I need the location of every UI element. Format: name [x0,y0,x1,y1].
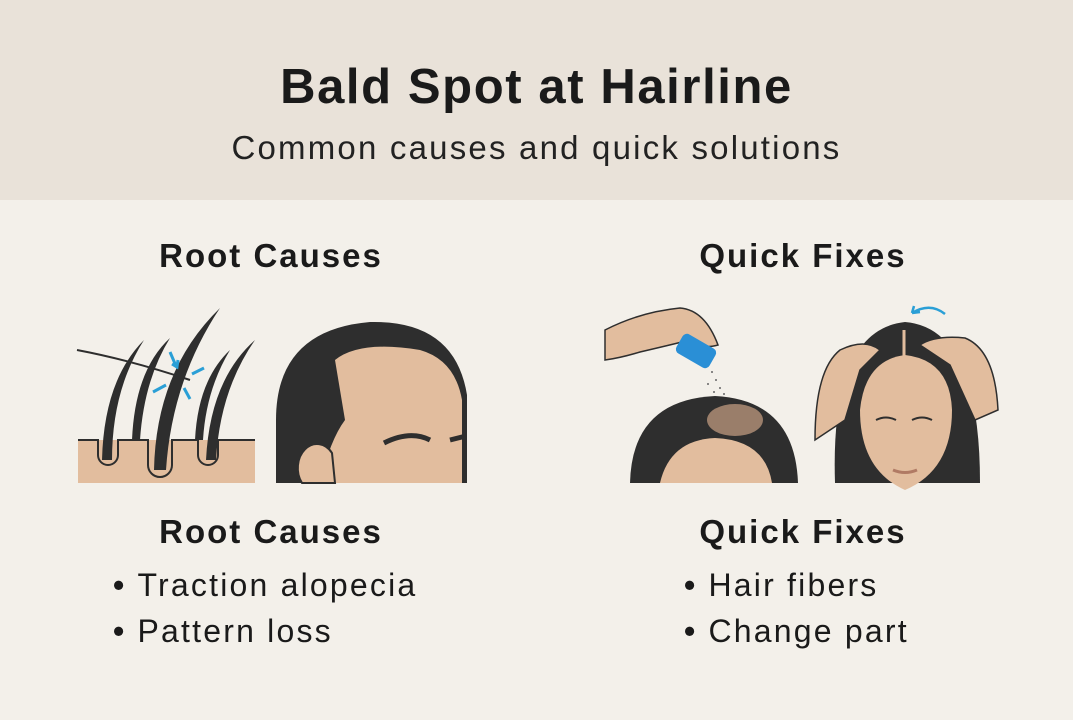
list: quick fixes [685,567,909,649]
list: quick fixes: Hair fibers [708,567,879,603]
heading: root causes: Root Causes [159,513,383,550]
icon: male pattern loss head [276,322,467,483]
icon: woman changing part [815,306,998,490]
heading: root causes top: Root Causes [159,237,383,274]
title: Bald Spot at Hairline [280,60,793,114]
icon: hair follicles traction [77,308,255,483]
heading: quick fixes top: Quick Fixes [699,237,907,274]
heading: quick fixes: Quick Fixes [699,513,907,550]
icon: thinning crown head [630,396,798,483]
list: root causes: Pattern loss [138,613,333,649]
list: root causes [114,567,417,649]
subtitle: Common causes and quick solutions [231,129,842,166]
icon: hand with hair fiber shaker [605,308,725,395]
list: quick fixes: Change part [708,613,909,649]
header band [0,0,1073,200]
list: root causes: Traction alopecia [138,567,417,603]
